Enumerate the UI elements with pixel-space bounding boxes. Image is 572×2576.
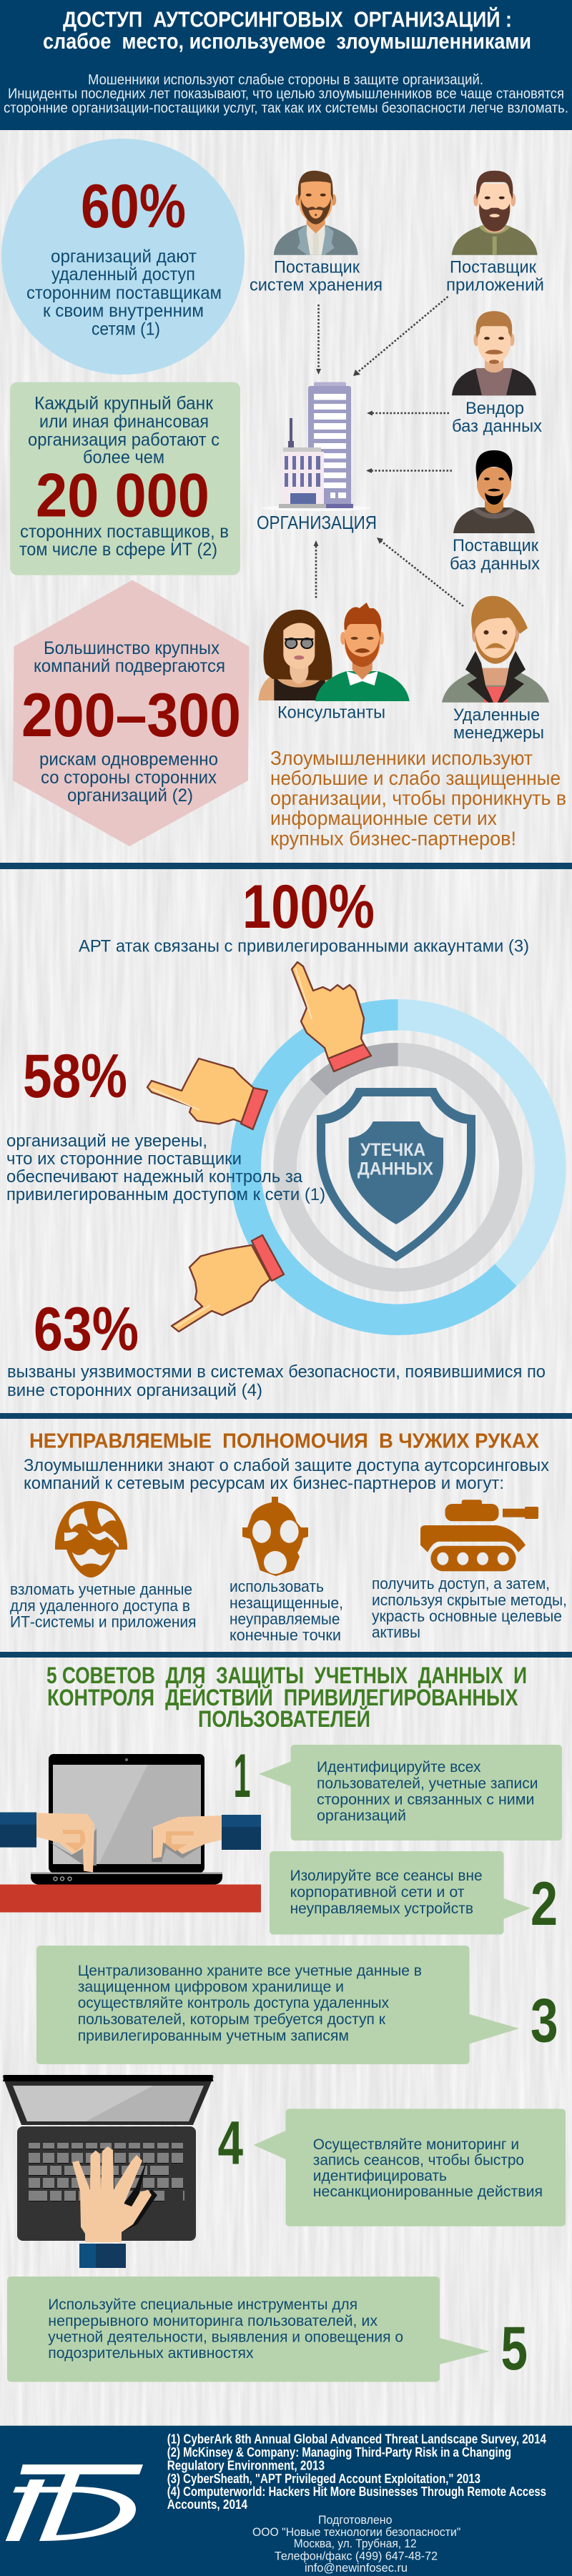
stat: 63%: 63% bbox=[34, 1295, 139, 1364]
panel: 20 000 vendors: или иная финансовая bbox=[39, 412, 209, 432]
panel: 200-300 hexagon: рискам одновременно bbox=[39, 749, 218, 769]
icon: laptop with two hands bbox=[0, 1754, 261, 1913]
label: storage vendor: Поставщик bbox=[274, 257, 360, 277]
tip 3: 3 bbox=[531, 1987, 558, 2056]
text: use unmanaged endpoints bbox=[230, 1577, 343, 1644]
icon: consultants woman and man bbox=[258, 603, 410, 701]
label: storage vendor bbox=[250, 257, 383, 294]
stat: 58% bbox=[6, 1042, 325, 1204]
icon: laptop keyboard with hand bbox=[3, 2075, 214, 2268]
arrow: storage vendor to organization bbox=[316, 304, 321, 375]
tip 4: Осуществляйте мониторинг и bbox=[313, 2136, 519, 2153]
tip 3: осуществляйте контроль доступа удаленных bbox=[78, 1994, 389, 2011]
references: (3) CyberSheath, "APT Privileged Account Exploitation," 2013 bbox=[167, 2472, 480, 2486]
icon: data leak shield bbox=[317, 1088, 475, 1262]
title: ДОСТУП АУТСОРСИНГОВЫХ ОРГАНИЗАЦИЙ : bbox=[63, 6, 512, 31]
stat: 100% APT attacks bbox=[79, 873, 529, 956]
company contacts: ООО "Новые технологии безопасности" bbox=[252, 2525, 460, 2539]
references: (2) McKinsey & Company: Managing Third-Party Risk in a Changing bbox=[167, 2445, 511, 2459]
company contacts: info@newinfosec.ru bbox=[305, 2561, 408, 2575]
tip 1: организаций bbox=[317, 1807, 406, 1824]
references: Regulatory Environment, 2013 bbox=[167, 2459, 325, 2473]
panel: 200-300 hexagon: компаний подвергаются bbox=[34, 656, 225, 676]
tip 5: подозрительных активностях bbox=[48, 2344, 254, 2362]
text: steal target assets: активы bbox=[372, 1623, 420, 1641]
text: compromise credentials: ИТ-системы и приложения bbox=[10, 1613, 196, 1631]
tip 1: пользователей, учетные записи bbox=[317, 1775, 538, 1792]
heading: НЕУПРАВЛЯЕМЫЕ ПОЛНОМОЧИЯ В ЧУЖИХ РУКАХ bbox=[29, 1430, 540, 1452]
panel: 20 000 vendors: сторонних поставщиков, в bbox=[20, 522, 229, 542]
label: application vendor: Поставщик bbox=[450, 257, 536, 277]
tip 4: 4 bbox=[218, 2109, 243, 2178]
tip 2: 2 bbox=[531, 1870, 558, 1938]
stat: 58%: что их сторонние поставщики bbox=[6, 1149, 242, 1169]
callout: attackers use small partners: организации, чтобы проникнуть в bbox=[270, 787, 566, 809]
panel: 20 000 vendors: Каждый крупный банк bbox=[34, 394, 214, 414]
stat: 58%: 58% bbox=[23, 1042, 127, 1111]
panel: unmanaged privileges bbox=[10, 1430, 567, 1644]
tip 3: защищенном цифровом хранилище и bbox=[78, 1978, 344, 1996]
tip 2 bbox=[270, 1851, 558, 1938]
panel: 200-300 hexagon: 200–300 bbox=[21, 681, 241, 750]
stat: 63% bbox=[7, 1295, 546, 1400]
icon: gas mask bbox=[242, 1497, 308, 1576]
intro text bbox=[24, 1456, 549, 1493]
text: steal target assets bbox=[372, 1575, 567, 1641]
arrow: application vendor to organization bbox=[353, 297, 448, 376]
tip 4: несанкционированные действия bbox=[313, 2183, 543, 2200]
tip 5 bbox=[7, 2277, 528, 2383]
arrow: consultants to organization bbox=[313, 540, 319, 598]
tip 1: 1 bbox=[233, 1742, 250, 1810]
panel: 200-300 hexagon bbox=[13, 580, 249, 846]
tip 3: привилегированным учетным записям bbox=[78, 2027, 349, 2044]
man bbox=[315, 603, 410, 701]
stat: 63%: вине сторонних организаций (4) bbox=[7, 1381, 262, 1400]
label: remote managers: менеджеры bbox=[453, 723, 544, 743]
label: application vendor: приложений bbox=[446, 276, 544, 294]
icon: hand pointing to 100% bbox=[292, 962, 371, 1071]
label: database supplier: Поставщик bbox=[453, 536, 538, 555]
tip 2: корпоративной сети и от bbox=[290, 1883, 465, 1901]
references: Accounts, 2014 bbox=[167, 2497, 247, 2512]
icon: helmet bbox=[55, 1501, 127, 1577]
panel: 20 000 vendors bbox=[10, 382, 240, 575]
text: compromise credentials: для удаленного доступа в bbox=[10, 1597, 190, 1615]
company contacts: Москва, ул. Трубная, 12 bbox=[294, 2537, 417, 2550]
icon: hand pointing to 58% bbox=[147, 1059, 267, 1129]
icon: tank bbox=[420, 1500, 538, 1571]
footer panel bbox=[0, 2426, 572, 2576]
text: steal target assets: получить доступ, а затем, bbox=[372, 1575, 550, 1592]
panel: 20 000 vendors: организация работают с bbox=[28, 430, 220, 450]
intro text: компаний к сетевым ресурсам их бизнес-партнеров и могут: bbox=[24, 1474, 504, 1493]
text: steal target assets: используя скрытые методы, bbox=[372, 1591, 567, 1609]
heading: 5 tips bbox=[46, 1663, 527, 1732]
text: use unmanaged endpoints: конечные точки bbox=[230, 1626, 341, 1644]
label: organization: ОРГАНИЗАЦИЯ bbox=[257, 512, 377, 533]
stat: 58%: обеспечивают надежный контроль за bbox=[6, 1167, 303, 1187]
icon: storage vendor person bbox=[274, 171, 358, 255]
icon: database supplier person bbox=[453, 450, 535, 533]
intro text bbox=[4, 72, 568, 116]
tip 2: Изолируйте все сеансы вне bbox=[290, 1867, 483, 1884]
label: remote managers: Удаленные bbox=[453, 705, 540, 725]
callout: attackers use small partners: небольшие и слабо защищенные bbox=[270, 767, 561, 789]
tip 3: Централизованно храните все учетные данные в bbox=[78, 1962, 422, 1979]
company contacts: Подготовлено bbox=[318, 2513, 392, 2527]
callout: attackers use small partners: крупных бизнес-партнеров! bbox=[270, 828, 516, 849]
stat: 100% APT attacks: 100% bbox=[242, 873, 375, 941]
header panel bbox=[0, 0, 572, 130]
text: steal target assets: украсть основные целевые bbox=[372, 1607, 562, 1625]
tip 5: учетной деятельности, выявления и оповещения о bbox=[48, 2329, 403, 2346]
stat: 58%: организаций не уверены, bbox=[6, 1131, 207, 1151]
stat: 100% APT attacks: АРТ атак связаны с привилегированными аккаунтами (3) bbox=[79, 937, 529, 956]
text: compromise credentials: взломать учетные данные bbox=[10, 1580, 192, 1598]
text: use unmanaged endpoints: незащищенные, bbox=[230, 1594, 343, 1612]
company contacts bbox=[252, 2513, 460, 2575]
panel: 200-300 hexagon: Большинство крупных bbox=[44, 638, 220, 658]
stat: 63%: вызваны уязвимостями в системах безопасности, появившимися по bbox=[7, 1362, 546, 1382]
tip 4: запись сеансов, чтобы быстро bbox=[313, 2151, 524, 2169]
tip 3: пользователей, которым требуется доступ к bbox=[78, 2011, 386, 2028]
company contacts: Телефон/факс (499) 647-48-72 bbox=[275, 2550, 438, 2563]
tip 1: Идентифицируйте всех bbox=[317, 1758, 481, 1775]
label: database vendor: баз данных bbox=[452, 417, 542, 436]
tip 4: идентифицировать bbox=[313, 2167, 447, 2184]
references bbox=[167, 2432, 546, 2512]
tip 1 bbox=[233, 1742, 562, 1841]
panel: 20 000 vendors: 20 000 bbox=[36, 462, 209, 530]
callout: attackers use small partners bbox=[270, 747, 566, 849]
label: consultants: Консультанты bbox=[277, 703, 385, 722]
intro text: Мошенники используют слабые стороны в защите организаций. bbox=[88, 72, 483, 88]
tip 5: 5 bbox=[500, 2314, 528, 2383]
stat: 58%: привилегированным доступом к сети (1) bbox=[6, 1185, 325, 1204]
panel: 20 000 vendors: более чем bbox=[83, 447, 164, 467]
woman bbox=[258, 610, 336, 700]
arrow: database vendor to organization bbox=[367, 410, 449, 416]
heading: 5 tips: ПОЛЬЗОВАТЕЛЕЙ bbox=[198, 1706, 370, 1732]
label: database supplier bbox=[450, 536, 540, 573]
panel: 200-300 hexagon: со стороны сторонних bbox=[41, 768, 217, 788]
arrow: remote managers to organization bbox=[377, 538, 463, 606]
icon: application vendor person bbox=[452, 171, 538, 255]
panel: 60% circle: 60% bbox=[81, 172, 186, 241]
tip 1: сторонних и связанных с ними bbox=[317, 1791, 535, 1808]
chart: donut rings bbox=[245, 1015, 551, 1319]
text: use unmanaged endpoints: неуправляемые bbox=[230, 1610, 340, 1628]
intro text: Злоумышленники знают о слабой защите доступа аутсорсинговых bbox=[24, 1456, 549, 1475]
panel: 20 000 vendors: том числе в сфере ИТ (2) bbox=[19, 540, 217, 560]
label: storage vendor: систем хранения bbox=[250, 276, 383, 294]
callout: attackers use small partners: информационные сети их bbox=[270, 807, 497, 829]
text: use unmanaged endpoints: использовать bbox=[230, 1577, 324, 1595]
label: database vendor: Вендор bbox=[465, 399, 524, 418]
panel: 60% circle: удаленный доступ bbox=[51, 264, 195, 284]
icon: database vendor person bbox=[452, 311, 536, 395]
label: application vendor bbox=[446, 257, 544, 294]
panel: 60% circle: сетям (1) bbox=[92, 319, 160, 339]
panel: 60% circle: сторонним поставщикам bbox=[26, 283, 222, 303]
icon: remote manager person bbox=[442, 596, 549, 703]
icon: data leak shield: УТЕЧКА bbox=[360, 1140, 425, 1160]
label: remote managers bbox=[453, 705, 544, 743]
callout: attackers use small partners: Злоумышленники используют bbox=[270, 747, 533, 769]
label: database supplier: баз данных bbox=[450, 555, 540, 573]
tip 5: Используйте специальные инструменты для bbox=[48, 2296, 358, 2313]
tip 3 bbox=[36, 1946, 558, 2064]
tip 5: непрерывного мониторинга пользователей, их bbox=[48, 2312, 378, 2329]
tip 2: неуправляемых устройств bbox=[290, 1900, 473, 1917]
label: database vendor bbox=[452, 399, 542, 436]
panel: 200-300 hexagon: организаций (2) bbox=[67, 786, 193, 806]
icon: data leak shield: ДАННЫХ bbox=[358, 1159, 433, 1179]
tip 4 bbox=[218, 2109, 566, 2226]
icon: hand pointing to 63% bbox=[172, 1235, 284, 1332]
icon: company logo bbox=[6, 2464, 143, 2541]
arrow: database supplier to organization bbox=[366, 468, 452, 473]
panel: 60% circle: к своим внутренним bbox=[43, 301, 204, 321]
title bbox=[43, 6, 531, 54]
panel: 60% circle bbox=[1, 139, 245, 375]
icon: organization building bbox=[262, 382, 370, 511]
panel: 60% circle: организаций дают bbox=[51, 247, 197, 267]
text: compromise credentials bbox=[10, 1580, 196, 1631]
